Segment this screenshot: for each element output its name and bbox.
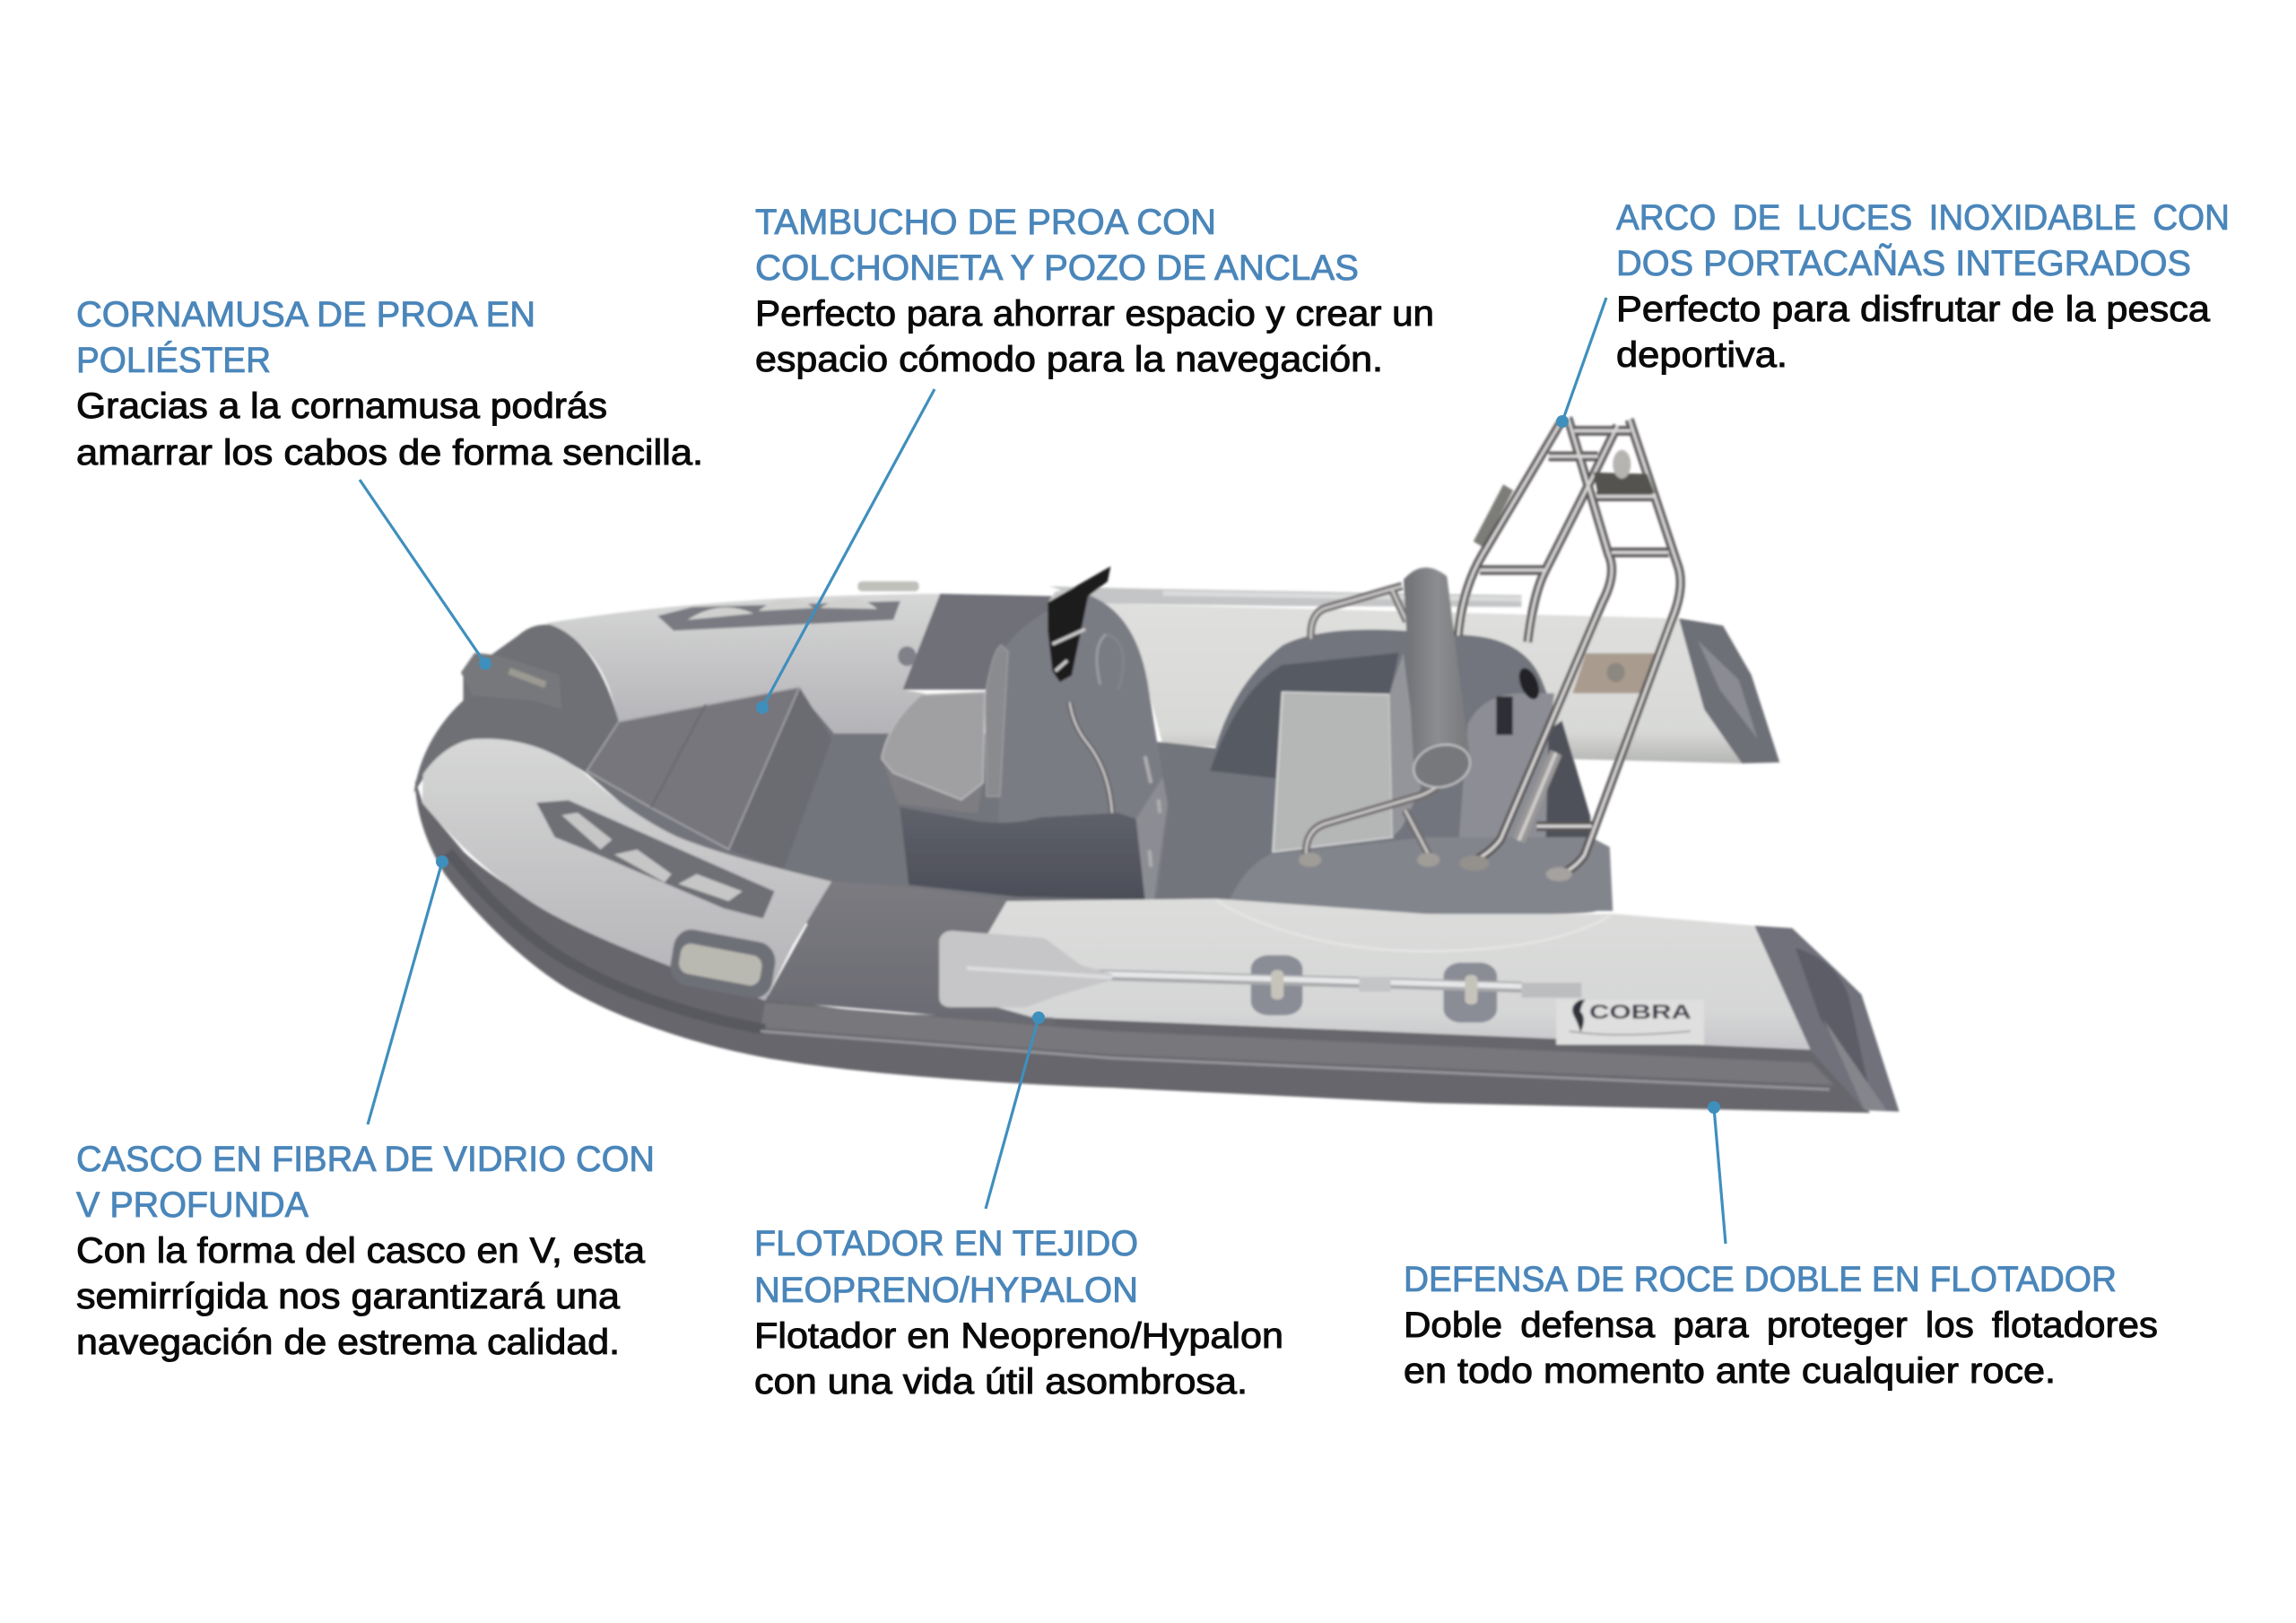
windscreen <box>1048 567 1110 682</box>
seat backrest <box>985 645 1008 796</box>
callout: casco en fibra de vidrio <box>76 855 655 1362</box>
leader line <box>1714 1107 1726 1244</box>
stern console <box>1210 629 1556 867</box>
oar shaft <box>1049 975 1522 987</box>
far tube stern section <box>1049 586 1779 763</box>
body text: Perfecto para ahorrar espacio y crear un <box>755 294 1434 334</box>
callout: defensa de roce: en todo momento ante cualquier roce. <box>1404 1351 2056 1391</box>
leader dot <box>756 701 769 714</box>
leader dot <box>1708 1101 1720 1114</box>
leader line <box>368 862 442 1124</box>
feet <box>1299 853 1321 867</box>
heading: CASCO EN FIBRA DE VIDRIO CON <box>76 1140 655 1179</box>
callout: tambucho de proa <box>755 203 1434 714</box>
body text: Perfecto para disfrutar de la pesca <box>1616 290 2211 329</box>
leader dot <box>479 657 491 670</box>
callout: casco en fibra de vidrio: V PROFUNDA <box>76 1185 309 1225</box>
console grab handle <box>1070 702 1112 813</box>
stainless arch <box>1458 418 1681 874</box>
stern cone near <box>1754 925 1900 1112</box>
hull and rub strake <box>415 780 1870 1113</box>
callout: arco de luces: deportiva. <box>1616 335 1787 375</box>
oar clip pads <box>1251 955 1302 1015</box>
center console with seat and windscreen <box>882 567 1169 899</box>
callout: cornamusa de proa: POLIÉSTER <box>76 340 271 380</box>
leader line <box>1562 298 1606 421</box>
side grab handle <box>667 926 778 1002</box>
callout: flotador: con una vida útil asombrosa. <box>754 1362 1248 1402</box>
callout: flotador: NEOPRENO/HYPALON <box>754 1271 1138 1310</box>
leader line <box>986 1018 1039 1209</box>
leader line <box>762 389 935 707</box>
body text: Gracias a la cornamusa podrás <box>76 386 607 426</box>
brand label backing <box>1556 1000 1704 1045</box>
seat cushion <box>882 759 983 813</box>
boat photograph <box>413 418 1900 1113</box>
heading: DEFENSA DE ROCE DOBLE EN FLOTADOR <box>1404 1260 2117 1299</box>
callout: flotador <box>754 1011 1283 1402</box>
heading: ARCO DE LUCES INOXIDABLE CON <box>1616 198 2230 238</box>
callout: cornamusa de proa: amarrar los cabos de forma sencilla. <box>76 433 703 473</box>
near tube bow and middle <box>422 739 1054 1025</box>
body text: Doble defensa para proteger los flotadores <box>1404 1306 2158 1345</box>
stern console side panel and controls <box>1459 664 1590 852</box>
heading: TAMBUCHO DE PROA CON <box>755 203 1216 242</box>
arch bracket plate <box>1572 654 1657 693</box>
near tube stern section <box>987 898 1900 1112</box>
stern console bars and roller <box>1299 418 1681 881</box>
callout: casco en fibra de vidrio: navegación de estrema calidad. <box>76 1323 620 1362</box>
callout: defensa de roce <box>1404 1101 2158 1391</box>
body text: Flotador en Neopreno/Hypalon <box>754 1316 1283 1356</box>
near bow handles <box>536 801 774 918</box>
bow locker with cushion <box>587 687 831 869</box>
cockpit floor <box>587 692 1271 950</box>
Cobra logo <box>1570 1000 1692 1035</box>
roller bolster <box>1404 568 1471 772</box>
callout: cornamusa de proa <box>76 295 703 670</box>
callout: casco en fibra de vidrio: semirrígida nos garantizará una <box>76 1277 621 1316</box>
heading: FLOTADOR EN TEJIDO <box>754 1224 1138 1263</box>
callout: tambucho de proa: COLCHONETA Y POZO DE ANCLAS <box>755 248 1359 288</box>
leader dot <box>1032 1011 1045 1024</box>
rod holder <box>1478 488 1509 544</box>
bow cleat <box>461 653 561 709</box>
callout: tambucho de proa: espacio cómodo para la navegación. <box>755 340 1383 379</box>
stern console deck mound <box>1229 838 1613 915</box>
Cobra logo: COBRA <box>1589 1001 1692 1023</box>
leader dot <box>1556 415 1569 428</box>
leader dot <box>436 855 448 868</box>
oar blade <box>939 931 1112 1007</box>
far tube bow section and nose <box>413 581 1054 793</box>
callout: arco de luces <box>1556 198 2230 428</box>
body text: Con la forma del casco en V, esta <box>76 1231 646 1271</box>
leader line <box>360 480 485 664</box>
callout: arco de luces: DOS PORTACAÑAS INTEGRADOS <box>1616 243 2191 283</box>
heading: CORNAMUSA DE PROA EN <box>76 295 535 334</box>
